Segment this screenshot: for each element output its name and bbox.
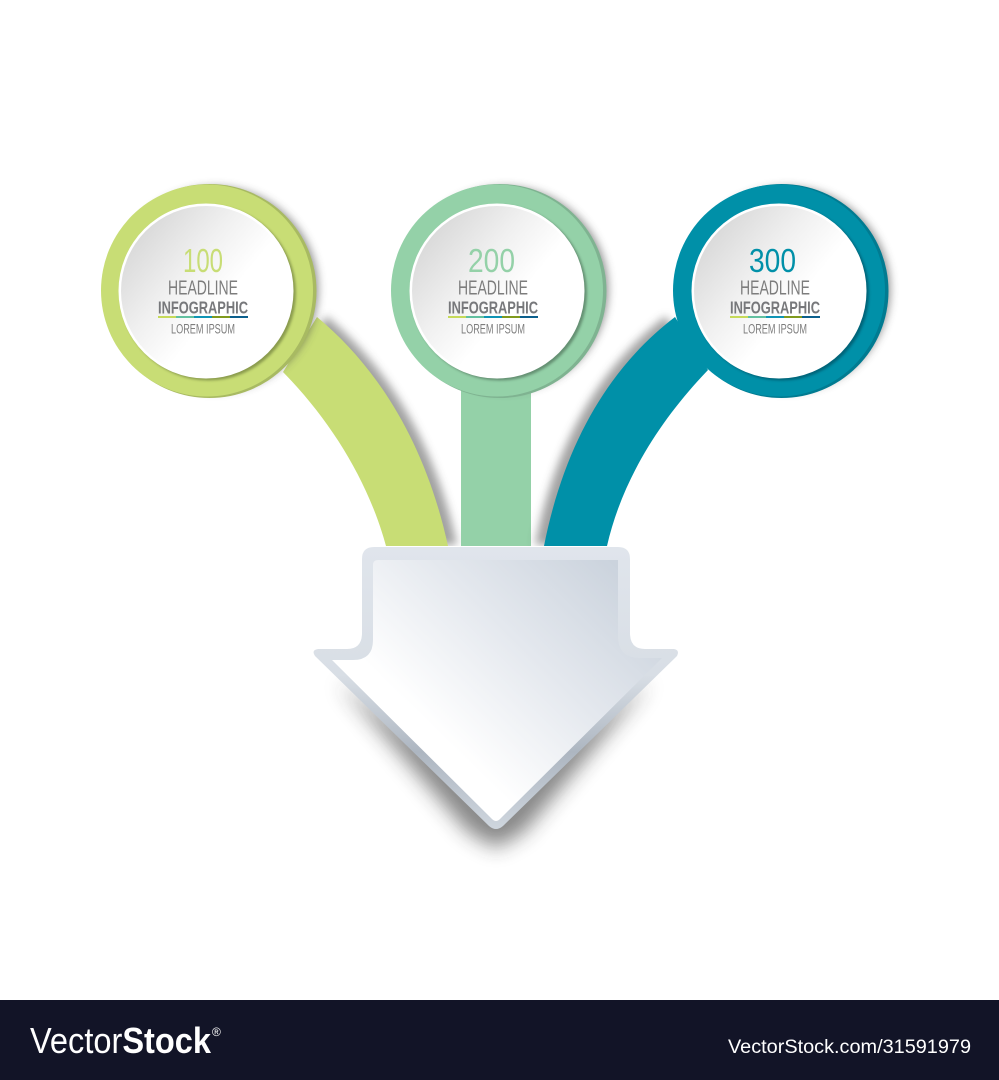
disc xyxy=(692,204,869,380)
mint connector band xyxy=(461,385,531,546)
rule xyxy=(730,316,820,318)
headline: HEADLINE xyxy=(740,276,810,300)
ring xyxy=(101,184,316,398)
disc xyxy=(118,204,296,380)
number: 100 xyxy=(183,242,223,279)
ring xyxy=(673,184,888,398)
ring shadow xyxy=(686,187,890,391)
lorem ipsum: LOREM IPSUM xyxy=(171,322,235,336)
infographic label: INFOGRAPHIC xyxy=(730,298,820,318)
disc xyxy=(410,204,587,380)
lorem ipsum: LOREM IPSUM xyxy=(461,322,525,336)
circle: 100 xyxy=(101,184,318,398)
headline: HEADLINE xyxy=(458,276,528,300)
arrow shadow xyxy=(338,682,650,848)
infographic label: INFOGRAPHIC xyxy=(158,298,248,318)
rule xyxy=(158,316,248,318)
number: 300 xyxy=(749,242,796,279)
large down arrow xyxy=(314,547,678,848)
green connector band xyxy=(283,316,457,546)
arrow face xyxy=(332,560,662,821)
brand logo: VectorStock xyxy=(30,1020,212,1061)
arrow edge xyxy=(314,547,678,829)
ring shadow xyxy=(404,187,608,391)
image id: VectorStock.com/31591979 xyxy=(728,1037,971,1058)
registered mark: ® xyxy=(212,1025,221,1039)
circle: 300 xyxy=(673,184,890,398)
ring shadow xyxy=(114,187,318,391)
infographic label: INFOGRAPHIC xyxy=(448,298,538,318)
footer bar xyxy=(0,1000,999,1080)
number: 200 xyxy=(468,242,515,279)
headline: HEADLINE xyxy=(168,276,238,300)
lorem ipsum: LOREM IPSUM xyxy=(743,322,807,336)
ring xyxy=(391,184,606,398)
rule xyxy=(448,316,538,318)
teal connector band xyxy=(535,316,708,546)
circle: 200 xyxy=(391,184,608,398)
